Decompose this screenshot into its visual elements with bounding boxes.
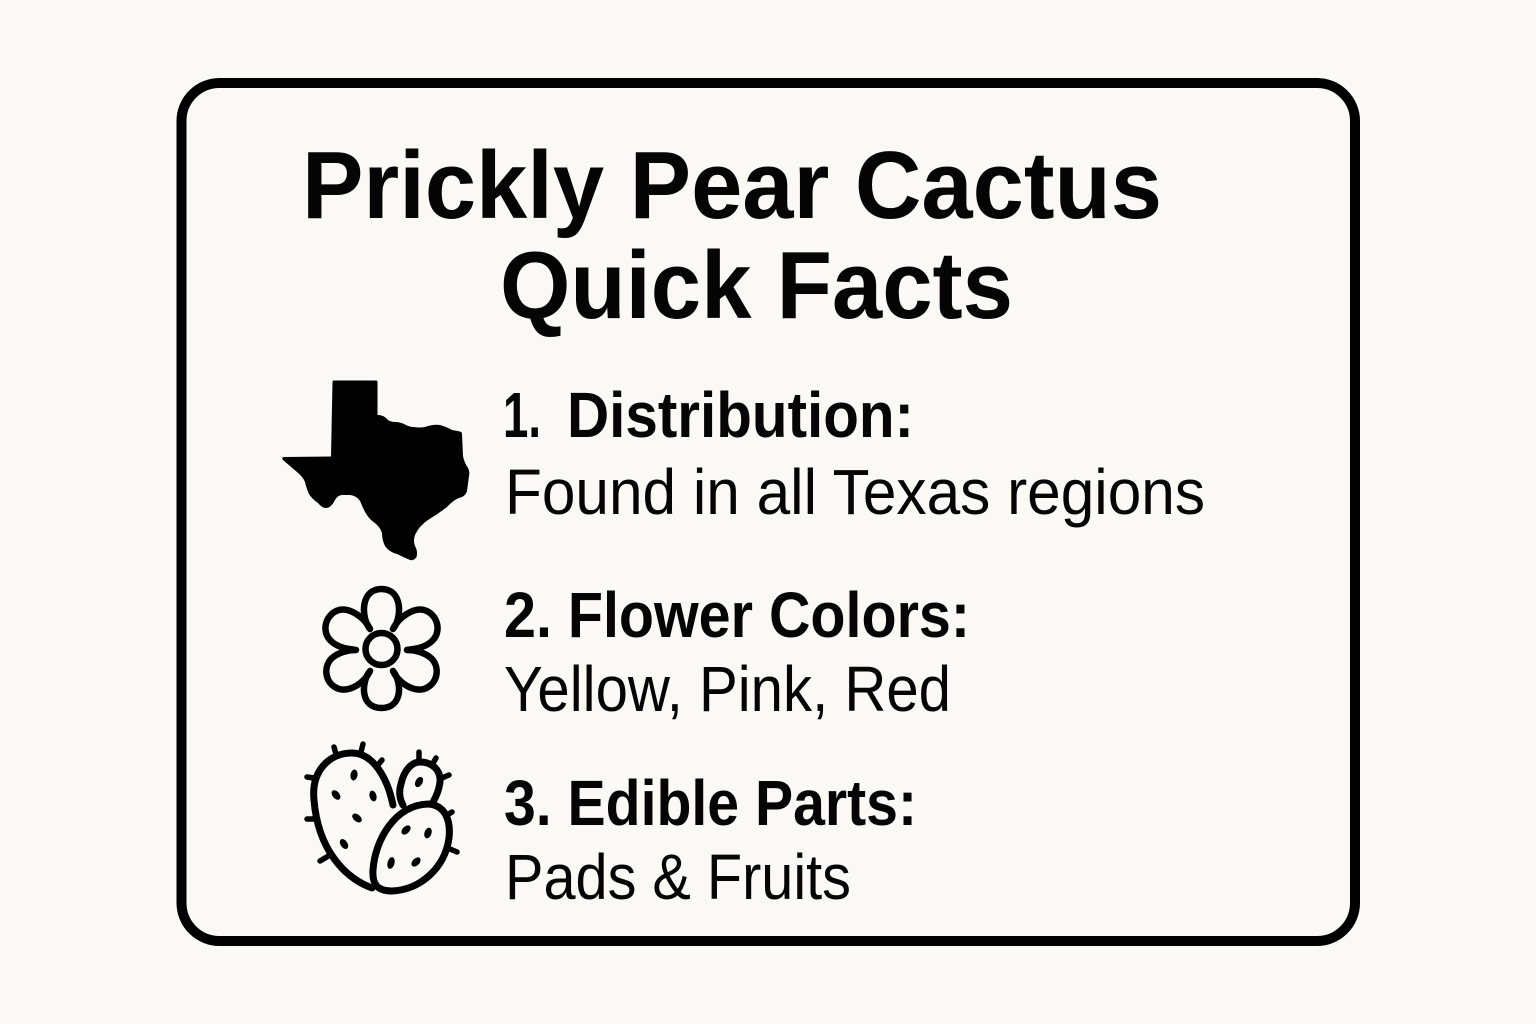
fact 3: edible parts: 3. Edible Parts:: [504, 767, 917, 839]
fact 1: distribution: Found in all Texas regions: [505, 456, 1205, 528]
title: Prickly Pear Cactus: [302, 132, 1162, 239]
fact 2: flower colors: Yellow, Pink, Red: [504, 653, 951, 725]
icon: prickly pear cactus: [307, 744, 457, 891]
fact 3: edible parts: [504, 767, 917, 913]
fact 1: distribution: Distribution:: [567, 379, 914, 451]
fact 1: distribution: [503, 379, 1205, 528]
fact 2: flower colors: [504, 579, 970, 725]
icon: Texas silhouette: [282, 380, 469, 560]
fact 2: flower colors: 2. Flower Colors:: [504, 579, 970, 651]
panel: quick facts card: [182, 83, 1355, 941]
title: Quick Facts: [500, 232, 1013, 339]
fact 3: edible parts: Pads & Fruits: [505, 841, 851, 913]
icon: flower: [325, 589, 438, 708]
title: [302, 132, 1162, 339]
fact 1: distribution: 1.: [503, 379, 541, 451]
